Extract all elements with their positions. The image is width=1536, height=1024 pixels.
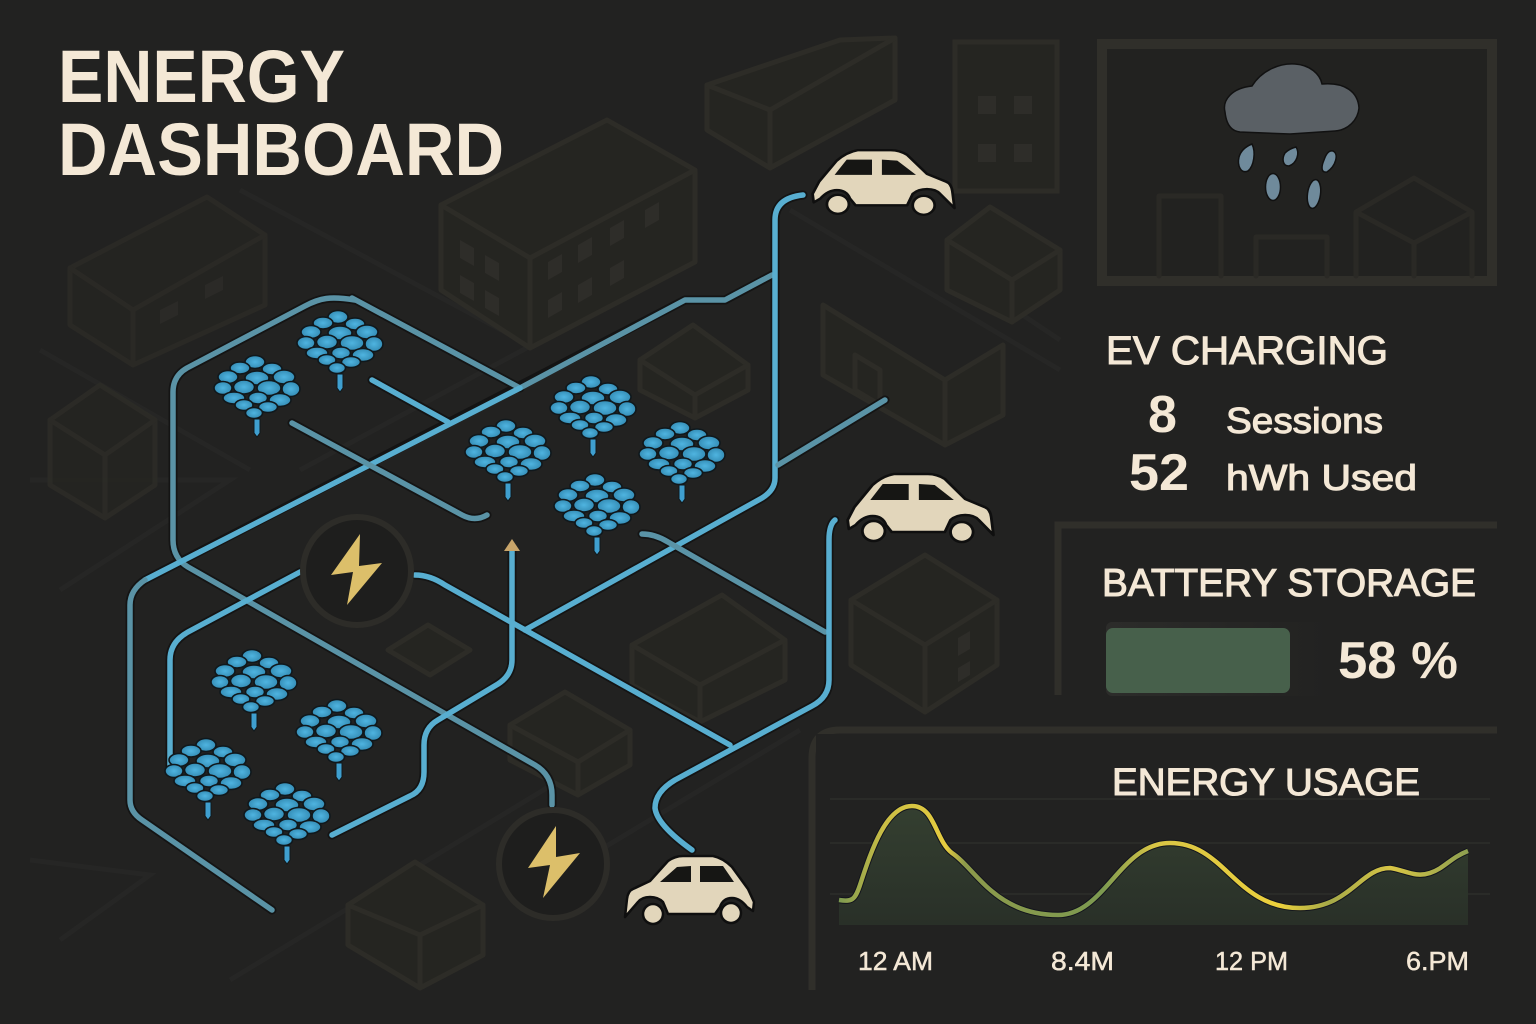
stat: sessions: Sessions [1226, 400, 1383, 441]
outer loop line [173, 298, 552, 805]
tree 4 [550, 376, 636, 457]
icon: rain drops [1238, 144, 1336, 209]
heading: ENERGY USAGE [1112, 762, 1420, 804]
tree 6 [554, 474, 640, 555]
long diagonal line [520, 275, 772, 388]
tree 3 [465, 420, 551, 501]
icon: car bottom [625, 856, 754, 924]
bolt 1 left line [170, 572, 300, 770]
building: left box [50, 385, 155, 518]
building: middle box [632, 595, 785, 722]
building: flat tile [388, 625, 470, 675]
building: centre small [640, 325, 748, 418]
title: DASHBOARD [58, 108, 504, 191]
heading: BATTERY STORAGE [1102, 562, 1476, 605]
short bright line [372, 380, 448, 422]
icon: lightning node 1 [303, 517, 411, 625]
chart grid [830, 799, 1490, 894]
building: top centre [707, 38, 895, 168]
stat: energy used: 52 [1129, 444, 1189, 502]
panel: EV charging [1106, 329, 1417, 502]
line halos [130, 195, 885, 910]
energy grid lines [130, 195, 885, 910]
icon: lightning node 2 [499, 810, 607, 918]
panel: weather [1102, 44, 1492, 281]
title: ENERGY [58, 35, 345, 118]
tree 10 [244, 782, 330, 864]
upper diagonal [352, 298, 520, 388]
solar trees [165, 310, 725, 864]
stat: sessions: 8 [1148, 386, 1177, 444]
arrow tip [504, 539, 520, 551]
bright diagonal section [145, 388, 520, 580]
icon: car middle [848, 474, 993, 542]
far left line [130, 580, 272, 910]
tree 7 [211, 650, 297, 731]
short curved line [292, 423, 487, 518]
stat: energy used [1129, 444, 1417, 502]
stat: energy used: hWh Used [1226, 457, 1417, 498]
line to right box [642, 534, 825, 632]
panel: battery storage [1058, 525, 1497, 699]
tree 2 [297, 310, 383, 392]
tree 9 [165, 738, 251, 820]
building: bottom box [348, 862, 483, 988]
battery value: 58 % [1338, 632, 1458, 690]
axis labels: 6.PM [1406, 946, 1469, 976]
isometric city buildings [50, 38, 1060, 988]
stat: sessions [1148, 386, 1383, 444]
axis labels: 8.4M [1051, 946, 1114, 976]
building: large block [441, 120, 695, 348]
building branch line [778, 400, 885, 465]
bolt 1 right line [415, 575, 730, 745]
tree 5 [639, 422, 725, 503]
building: lower box [510, 692, 630, 795]
axis labels: 12 PM [1215, 946, 1288, 976]
icon: rain cloud [1224, 64, 1359, 134]
background street lines [30, 190, 1060, 980]
line from middle car to bottom car [655, 520, 835, 850]
tree 8 [296, 700, 382, 781]
area chart [839, 806, 1468, 925]
building: tall rectangle [955, 42, 1057, 191]
tree 1 [214, 356, 300, 437]
battery track [1106, 622, 1330, 696]
faint skyline [1159, 178, 1472, 276]
building: right box [851, 555, 997, 712]
icon: car top [813, 150, 954, 215]
battery level bar [1106, 628, 1290, 693]
building: upper left [70, 197, 265, 365]
heading: EV CHARGING [1106, 329, 1388, 373]
title [58, 35, 504, 191]
line from top car [525, 195, 803, 630]
building: house outline [823, 305, 1003, 445]
panel: energy usage [812, 730, 1506, 1004]
building: right of car [947, 207, 1060, 322]
axis labels: 12 AM [858, 946, 933, 976]
axis labels [858, 946, 1469, 976]
centre riser line [332, 548, 512, 835]
